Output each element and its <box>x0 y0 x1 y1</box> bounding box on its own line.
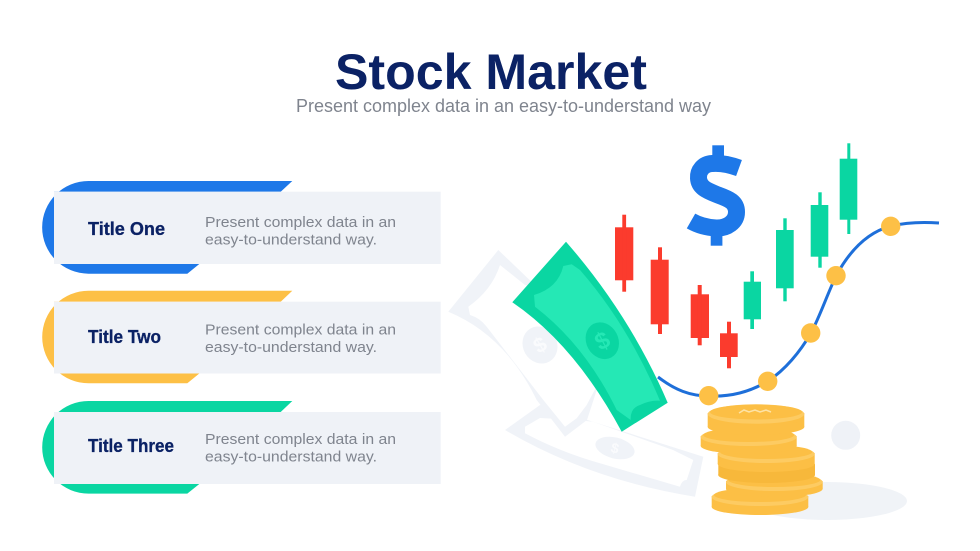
red candles <box>615 215 738 368</box>
panel: title one <box>42 181 441 274</box>
subtitle: Present complex data in an easy-to-understand way <box>296 96 711 116</box>
card background <box>54 192 441 264</box>
coin 2 <box>701 428 797 454</box>
description: Present complex data in an <box>205 214 396 231</box>
description: easy-to-understand way. <box>205 339 377 356</box>
coin 5 <box>712 488 808 515</box>
blue tab <box>42 181 292 274</box>
title: Stock Market <box>335 44 647 100</box>
description: easy-to-understand way. <box>205 232 377 248</box>
icon: ghost bill back: $ <box>609 439 621 457</box>
description <box>205 214 396 248</box>
green candles <box>744 143 857 329</box>
description: easy-to-understand way. <box>205 448 377 466</box>
green tab <box>42 401 292 494</box>
coin shadow <box>747 482 907 520</box>
coin 1 <box>708 404 804 435</box>
icon: green banknote: $ <box>590 326 615 356</box>
heading: Title Three <box>88 436 174 456</box>
line chart <box>658 217 939 405</box>
icon: dollar sign <box>691 145 739 246</box>
description <box>205 322 396 356</box>
panel: title two <box>42 291 441 383</box>
description: Present complex data in an <box>205 322 396 338</box>
description: Present complex data in an <box>205 431 396 448</box>
heading: Title One <box>88 219 165 239</box>
coin 3 <box>718 445 815 472</box>
panel: title three <box>42 401 441 494</box>
icon: ghost bill back <box>505 405 703 497</box>
icon: ghost bill front: $ <box>529 332 551 358</box>
icon: green banknote <box>512 242 668 432</box>
heading: Title Two <box>88 327 161 347</box>
icon: coin stack <box>701 404 823 515</box>
coin 4 <box>726 473 823 497</box>
card background <box>54 412 441 484</box>
description <box>205 431 396 466</box>
card background <box>54 302 441 374</box>
yellow tab <box>42 291 292 383</box>
candlestick chart <box>615 143 857 368</box>
icon: ghost bill front <box>448 250 600 437</box>
coin 3 dark <box>718 464 815 483</box>
decorative circle <box>831 421 860 450</box>
